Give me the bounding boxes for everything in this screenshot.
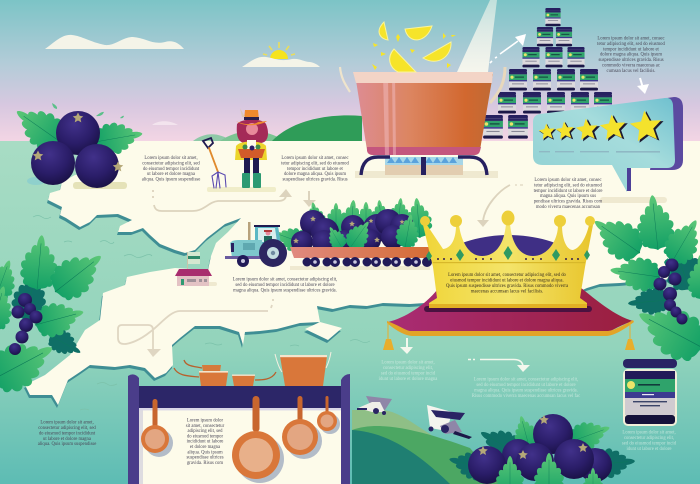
text block: white jar: idunt ut labore et dolore [626,447,672,452]
text block: pans: aliqua. Quis ipsum [187,450,223,455]
text block: coast: Lorem ipsum dolor sit amet, [40,420,94,426]
crown [420,210,595,308]
text block: crown: Quis ipsum suspendisse ultrices gravida. Risus commodo viverra [446,284,569,289]
pitchfork [203,138,226,188]
text block: award: tempor incididunt ut labore et dolore [534,189,602,194]
cushion tassels [383,323,635,350]
jam pot [340,67,505,178]
arrow: to jars [490,34,526,63]
speech bubble with star rating [533,97,683,203]
hanging rack with pans [128,374,350,484]
island [304,322,342,343]
text block: coast: ut labore et dolore magna [43,437,92,442]
text block: pans: sit amet, consectetur [186,424,225,429]
text block: reviews: cumsan lacus vel facilisis. [607,69,655,74]
farm house with flag [175,252,217,286]
text block: pans: gravida. Risus com [187,461,223,466]
text block: reviews: tetur adipiscing elit, sed do eiusmod [597,42,666,47]
arrow: up to farmer [153,189,292,211]
text block: white jar: sed do eiusmod tempor incid [622,441,677,446]
text block: tractor: magna aliqua. Quis ipsum suspendisse ultrices gravida. [233,288,337,293]
text block: transport: Lorem ipsum dolor sit amet, consec [281,156,349,161]
text block: award: tetur adipiscing elit, sed do eiusmod [534,183,603,188]
hills behind horizon [193,115,362,141]
text block: white centre: Risus commodo viverra maecenas accumsan lacus vel fac [472,394,580,399]
cloud: left [45,35,184,49]
text block: transport: dolore magna aliqua. Quis ipsum [284,172,346,177]
small pan [141,399,173,457]
sun [263,42,295,59]
trailer of blackcurrants and leaves [270,197,433,270]
jar pyramid [483,8,612,139]
text block: crown: eiusmod tempor incididunt ut labore et dolore magna aliqua. [450,278,564,284]
text block: crown: Lorem ipsum dolor sit amet, consectetur adipiscing elit, sed do [448,273,567,278]
bottom blackcurrants with leaves [446,413,636,484]
jam jar [623,359,677,426]
text block: white left: idunt ut labore et dolore magna [379,377,438,382]
arrow: to rating bubble [637,78,649,94]
text block: white left: Lorem ipsum dolor sit amet, [381,360,435,366]
text block: white jar: consectetur adipiscing elit, [624,436,674,441]
copper pots on shelf [174,352,331,386]
velvet cushion [387,287,634,336]
text block: coast: aliqua. Quis ipsum suspendisse [38,442,96,447]
text block: reviews: tempor incididunt ut labore et [603,47,660,52]
text block: white left: consectetur adipiscing elit, [383,366,433,371]
large pan [232,396,284,483]
tiny pan [317,396,340,434]
text block: pans: adipiscing elit, sed [187,429,223,434]
text block: pans: Lorem ipsum dolor [187,418,224,424]
text block: reviews: commodo viverra maecenas ac [602,64,660,68]
top-left blackcurrants with leaves [7,97,145,189]
text block: harvest: aliqua. Quis ipsum suspendisse [142,178,200,183]
text block: white left: sed do eiusmod tempor incid [381,371,436,376]
text block: white centre: sed do eiusmod tempor incididunt ut labore et dolore [476,383,576,388]
text block: award: pendisse ultrices gravida. Risus com [534,200,603,205]
sky background [0,0,700,141]
text block: pans: suspendisse ultrices [186,456,224,461]
text block: white jar: Lorem ipsum dolor sit amet, [622,430,676,436]
faint cloud on horizon [152,121,178,125]
text block: harvest: do eiusmod tempor incididunt [143,167,200,172]
bottom hills [352,410,500,484]
text block: transport: suspendisse ultrices gravida. Risus [282,178,348,183]
arrow: white down [400,338,413,354]
right leaves with blackcurrant cluster [585,193,700,369]
arrow: to crown [477,185,523,227]
text block: harvest: ut labore et dolore magna [147,172,196,177]
text block: reviews: dolore magna aliqua. Quis ipsum [600,53,662,58]
tractor [225,222,287,267]
map: land with coast shadow [24,141,700,408]
sugar stream [457,0,497,72]
text block: pans: do eiusmod tempor [187,434,224,439]
text block: coast: do eiusmod tempor incididunt [39,431,96,436]
text block: award: magna aliqua. Quis ipsum sus [540,194,596,199]
text block: harvest: consectetur adipiscing elit, sed [142,161,200,166]
text block: tractor: Lorem ipsum dolor sit amet, consectetur adipiscing elit, [233,278,337,282]
arrow: looping to pans [118,299,273,357]
lemons [372,22,456,72]
text block: crown: maecenas accumsan lacus vel facilisis. [471,289,543,294]
arrow: white right then down [468,360,530,372]
text block: coast: consectetur adipiscing elit, sed [38,426,96,431]
text block: harvest: Lorem ipsum dolor sit amet, [144,156,198,161]
small harvester [357,396,392,415]
text block: white centre: Lorem ipsum dolor sit amet, consectetur adipiscing elit, [474,378,578,382]
text block: award: modo viverra maecenas accumsan [536,205,601,210]
text block: transport: tetur adipiscing elit, sed do eiusmod [281,161,350,166]
text block: pans: et dolore magna [190,445,221,450]
medium pan [282,396,322,459]
large harvester [427,405,472,439]
sea background [0,141,700,484]
text block: white centre: magna aliqua. Quis ipsum suspendisse ultrices gravida. [474,388,578,393]
text block: tractor: sed do eiusmod tempor incididunt ut labore et dolore [235,283,335,288]
text block: award: Lorem ipsum dolor sit amet, consec [534,178,602,183]
farmer [207,108,276,192]
text block: transport: tempor incididunt ut labore et [287,167,344,172]
text block: reviews: suspendisse ultrices gravida. Risus [598,58,664,63]
sea ripples [33,216,370,410]
text block: pans: incididunt ut labore [187,440,223,445]
cloud: right [242,57,320,67]
text block: reviews: Lorem ipsum dolor sit amet, consec [597,36,665,42]
arrow: down to trailer [303,191,316,207]
left leaves with blackcurrant cluster [0,234,113,400]
